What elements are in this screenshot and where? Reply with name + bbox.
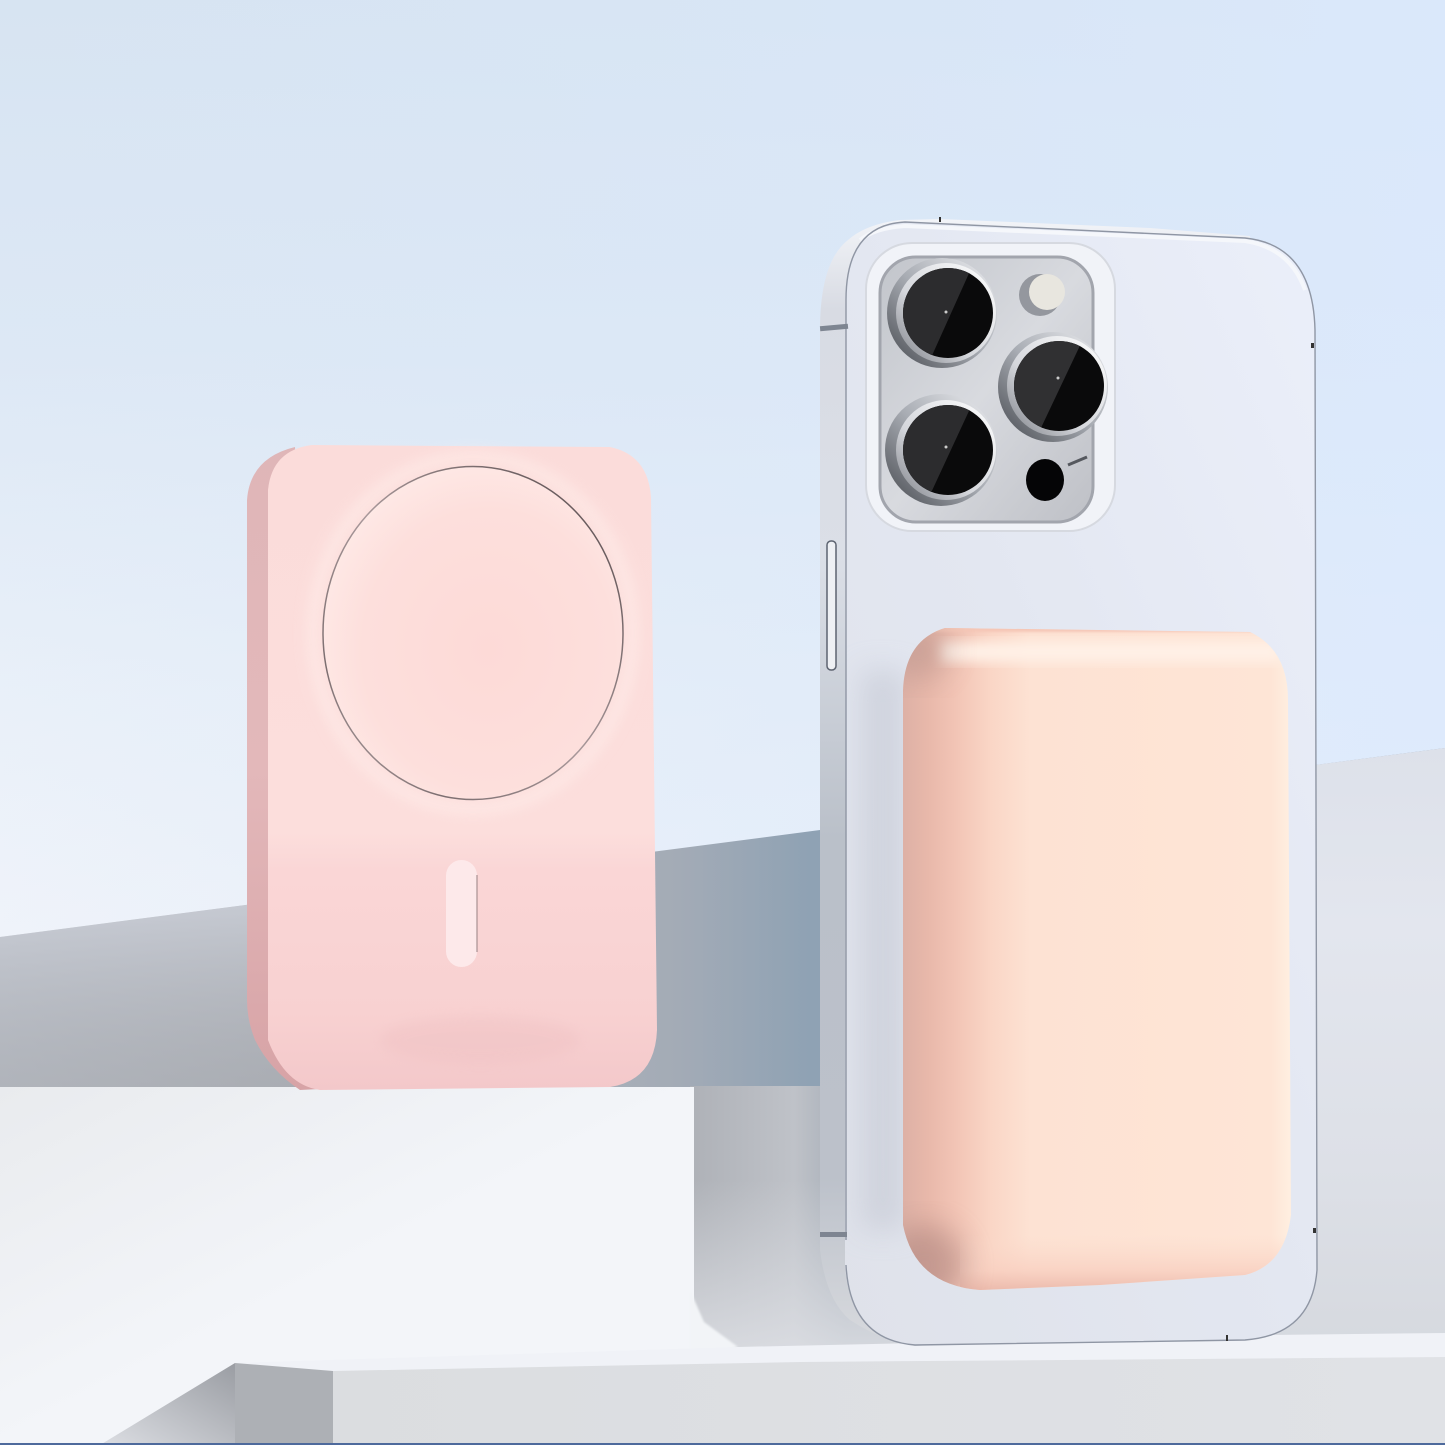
pink bank bottom mottling (380, 1016, 580, 1064)
phone back panel (845, 222, 1317, 1345)
frame edge lines (846, 222, 1317, 1345)
phone top rim highlight (860, 226, 1305, 290)
camera inner face (880, 257, 1093, 522)
pink bank face (268, 445, 657, 1090)
antenna bands (820, 217, 1316, 1341)
background sky (0, 0, 1445, 1000)
top lens (887, 258, 997, 368)
bottom lens (885, 394, 997, 506)
side button (827, 541, 836, 670)
scratch mark (1068, 457, 1087, 465)
microphone hole (1026, 459, 1064, 501)
upper white step (0, 1086, 950, 1445)
magnetic ring (313, 457, 633, 809)
slot indicator (446, 860, 477, 967)
back wall (0, 748, 1445, 1360)
phone frame (820, 219, 1255, 1346)
peach bank body (885, 620, 1295, 1305)
camera plateau (866, 243, 1115, 531)
pink power bank (247, 445, 657, 1090)
flash (1019, 274, 1065, 316)
phone left shadow (860, 670, 906, 1230)
phone (820, 217, 1317, 1346)
lower step (0, 1333, 1445, 1445)
peach power bank (885, 620, 1295, 1305)
camera module (866, 243, 1115, 531)
right lens (998, 332, 1108, 442)
pink bank edge (247, 447, 320, 1090)
